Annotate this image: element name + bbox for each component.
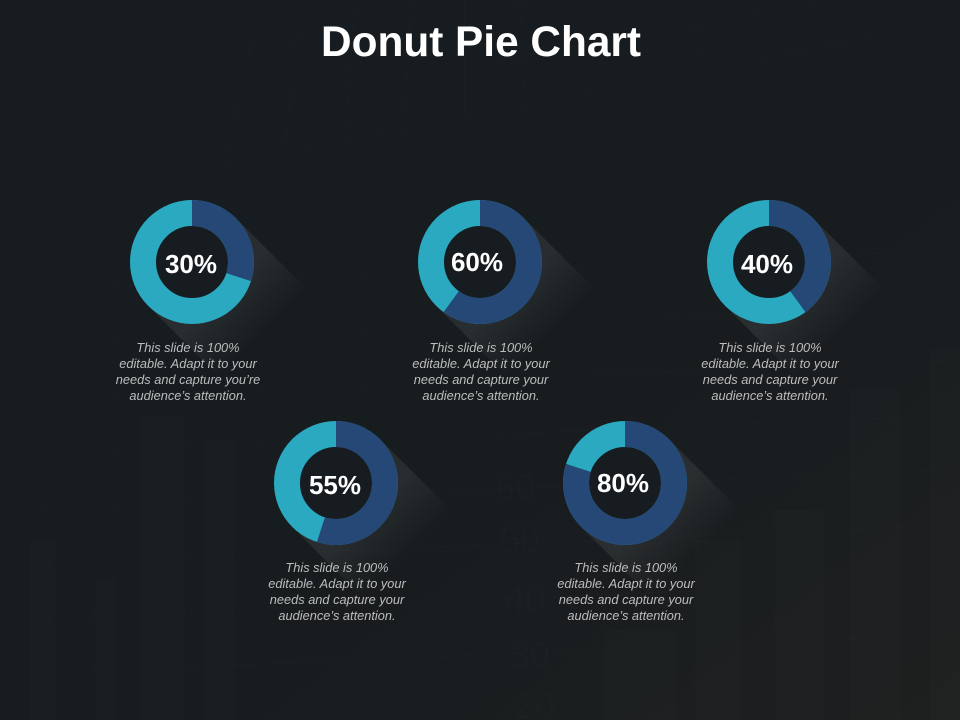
long shadow [292, 439, 449, 596]
value: 80% [597, 468, 649, 498]
caption: needs and capture your [703, 372, 838, 387]
background: 40 [505, 579, 545, 620]
caption: needs and capture your [270, 592, 405, 607]
caption: editable. Adapt it to your [268, 576, 407, 591]
caption: editable. Adapt it to your [557, 576, 696, 591]
caption: needs and capture you’re [116, 372, 260, 387]
caption: needs and capture your [559, 592, 694, 607]
caption: audience’s attention. [422, 388, 540, 403]
caption: audience’s attention. [567, 608, 685, 623]
value: 30% [165, 249, 217, 279]
long shadow [581, 439, 738, 596]
value: 55% [309, 470, 361, 500]
caption: audience’s attention. [711, 388, 829, 403]
donut chart 55% [274, 421, 398, 545]
long shadow [725, 218, 882, 375]
background: 60 [495, 467, 535, 508]
caption: editable. Adapt it to your [701, 356, 840, 371]
donut chart 40% [707, 200, 831, 324]
value: 60% [451, 247, 503, 277]
panel: donut 60% [412, 200, 593, 403]
panel: donut 80% [557, 421, 738, 623]
title: Donut Pie Chart [321, 18, 641, 66]
caption: This slide is 100% [136, 340, 240, 355]
donut chart 60% [418, 200, 542, 324]
donut chart 30% [130, 200, 254, 324]
panel: donut 30% [116, 200, 305, 403]
caption: This slide is 100% [429, 340, 533, 355]
caption: audience’s attention. [278, 608, 396, 623]
caption: This slide is 100% [285, 560, 389, 575]
panel: donut 55% [268, 421, 449, 623]
background: 30 [510, 635, 550, 676]
caption: This slide is 100% [718, 340, 822, 355]
panel: donut 40% [701, 200, 882, 403]
caption: audience’s attention. [129, 388, 247, 403]
background: 50 [500, 519, 540, 560]
long shadow [436, 218, 593, 375]
caption: This slide is 100% [574, 560, 678, 575]
caption: editable. Adapt it to your [119, 356, 258, 371]
value: 40% [741, 249, 793, 279]
caption: needs and capture your [414, 372, 549, 387]
long shadow [148, 218, 305, 375]
donut chart 80% [563, 421, 687, 545]
caption: editable. Adapt it to your [412, 356, 551, 371]
